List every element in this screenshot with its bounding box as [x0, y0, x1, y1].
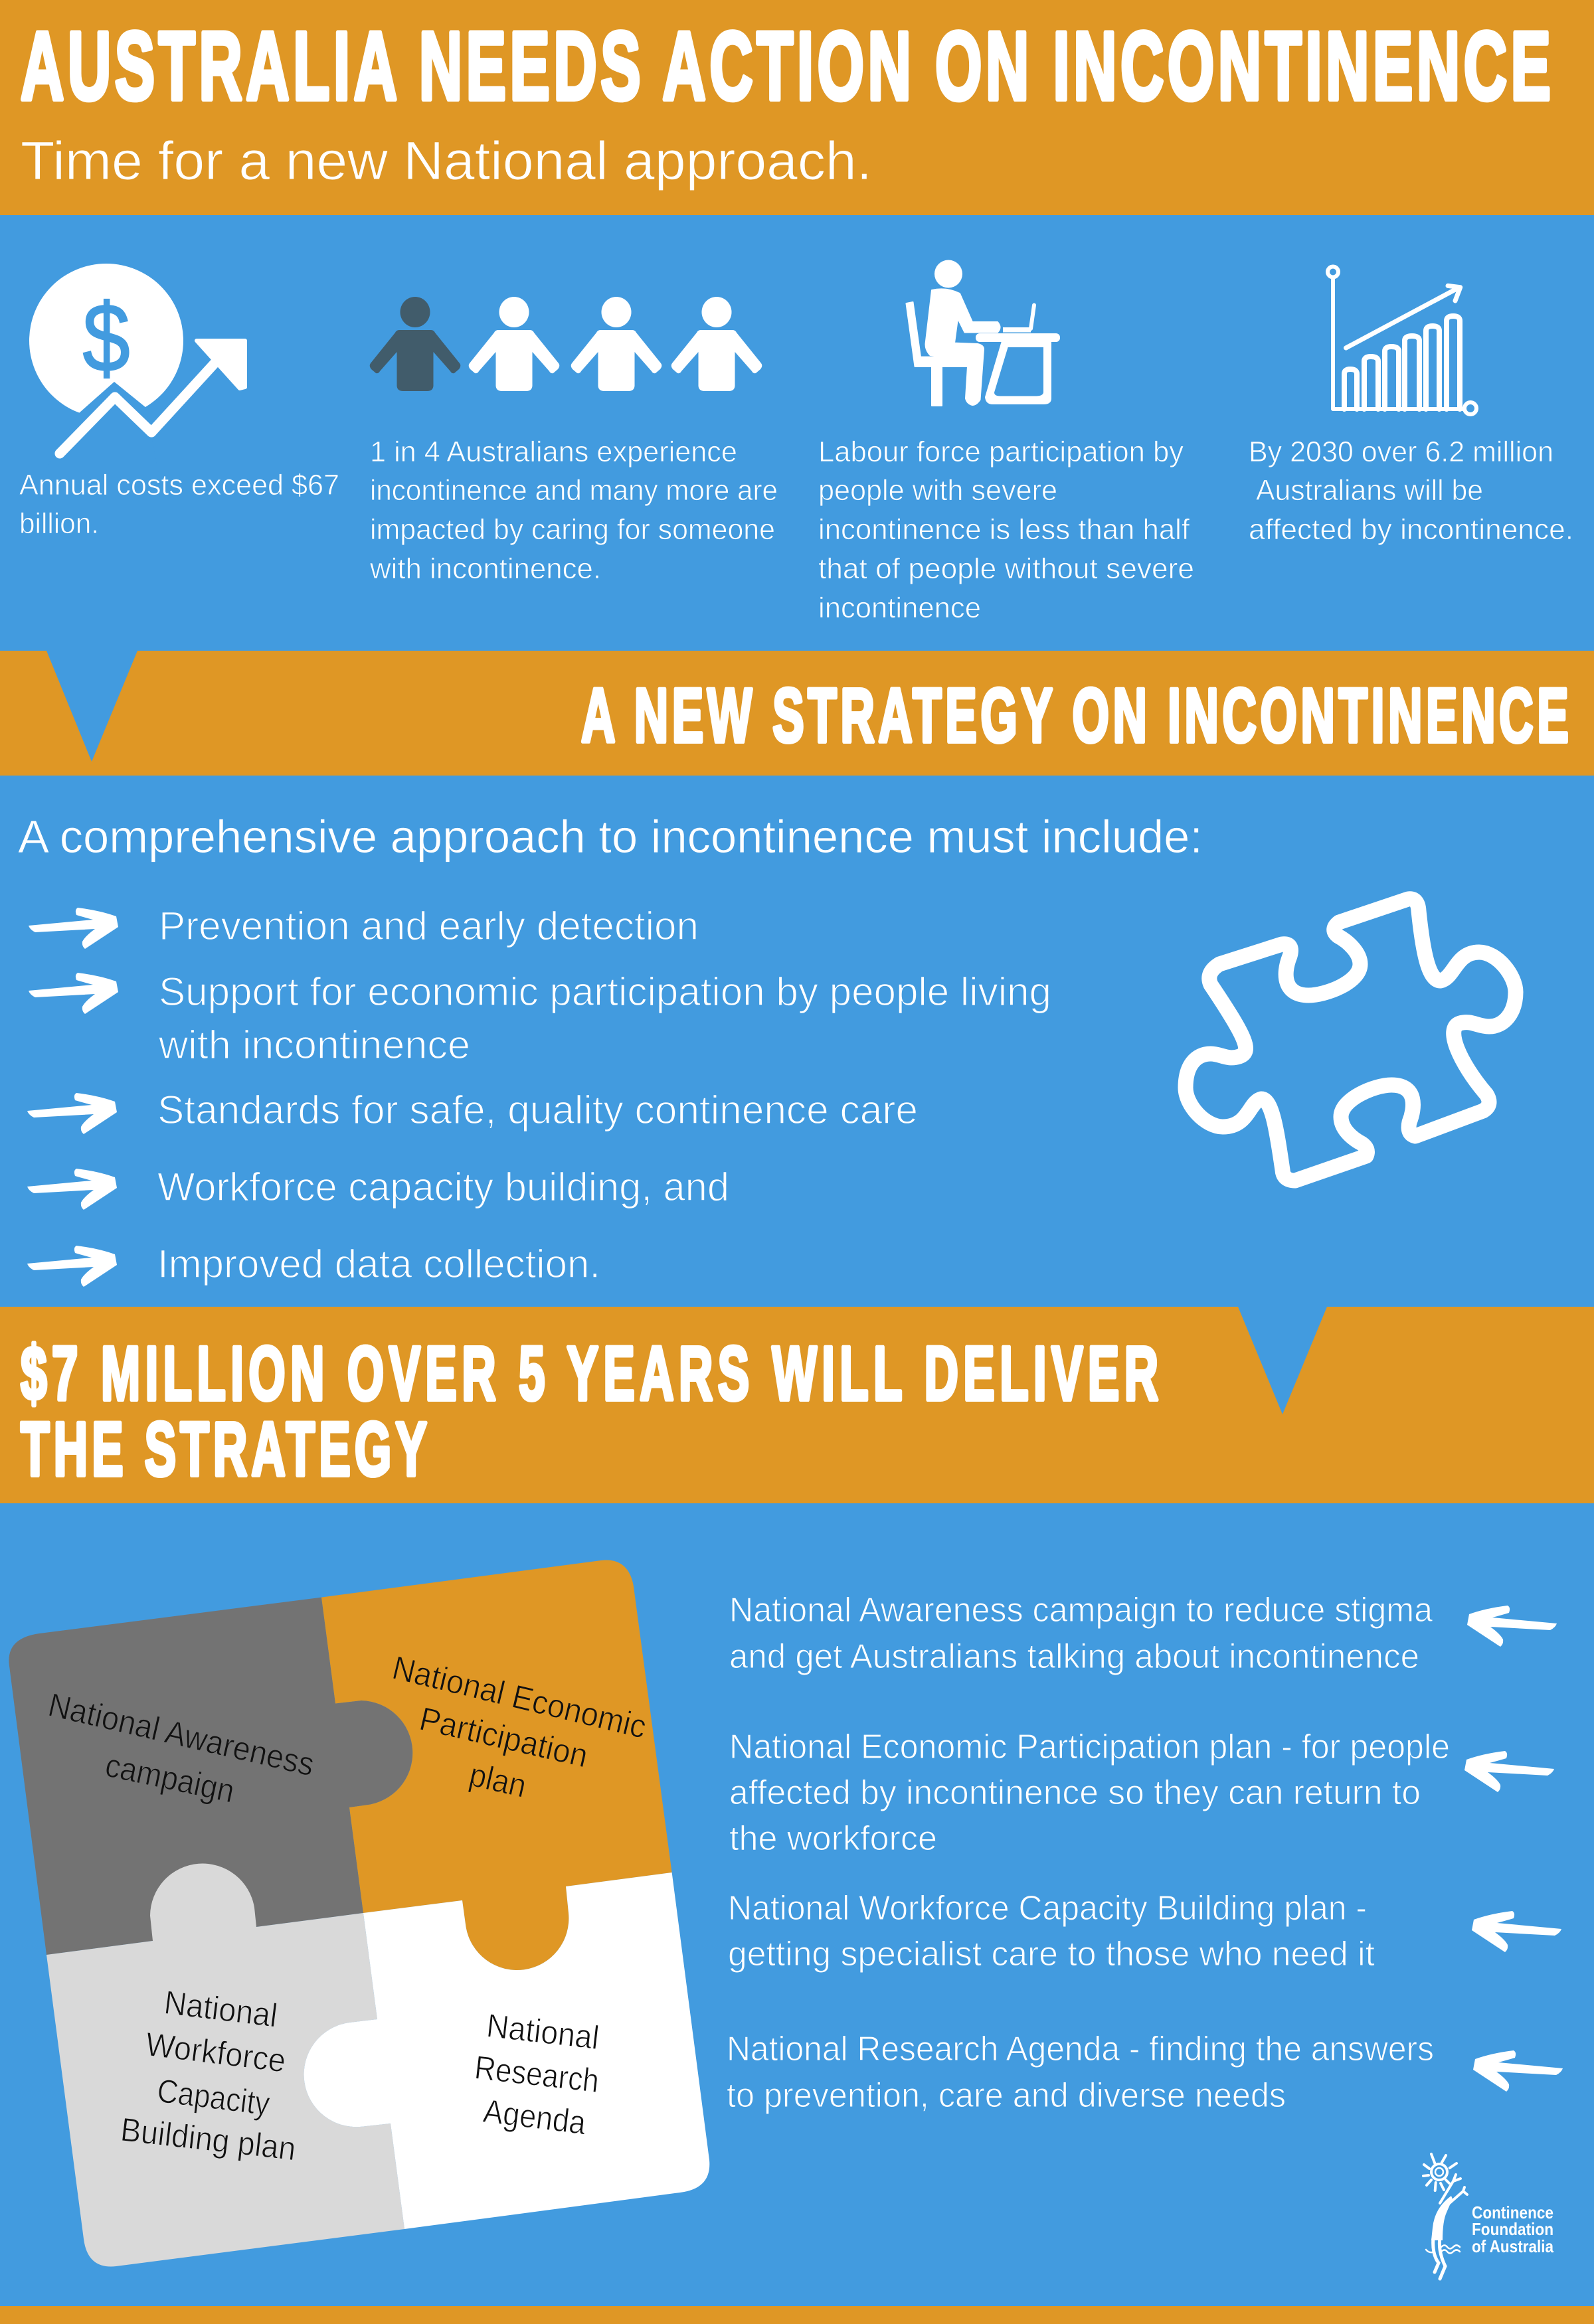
bullet text 2 [158, 969, 1051, 1067]
heading: funding: $7 MILLION OVER 5 YEARS WILL DELIVER [21, 1331, 1158, 1416]
piece: national workforce capacity building plan: Workforce [143, 2025, 288, 2080]
text: labour force participation: incontinence is less than half [818, 513, 1190, 546]
subtitle: Time for a new National approach. [21, 131, 872, 191]
bullet arrow 2 [29, 973, 118, 1014]
text: by 2030 [1249, 436, 1573, 546]
icon: coin with rising arrow [29, 264, 245, 478]
text: annual costs [19, 469, 339, 540]
piece: national economic participation plan: plan [466, 1756, 530, 1805]
plan description: economic participation [729, 1728, 1450, 1858]
piece: national workforce capacity building plan: Capacity [155, 2072, 272, 2123]
arrow: awareness [1467, 1606, 1557, 1647]
text: 1 in 4 Australians: impacted by caring for someone [370, 513, 775, 546]
heading: a new strategy: A NEW STRATEGY ON INCONTINENCE [581, 673, 1569, 758]
piece: national awareness campaign [9, 1598, 412, 1955]
plan description: research [727, 2030, 1434, 2115]
jigsaw of four plans [9, 1560, 709, 2266]
heading: funding: THE STRATEGY [21, 1407, 427, 1492]
bullet list [27, 904, 1051, 1287]
piece: national research agenda: Research [473, 2048, 601, 2100]
plan description: workforce [728, 1889, 1375, 1973]
plan description: workforce: getting specialist care to those who need it [728, 1935, 1375, 1973]
icon: four people, one highlighted [370, 297, 762, 391]
plan description: economic participation: National Economic Participation plan - for people [729, 1728, 1450, 1766]
text: by 2030: affected by incontinence. [1249, 513, 1573, 546]
footer band [0, 2306, 1594, 2324]
band: funding [0, 1307, 1594, 1503]
heading: funding [21, 1331, 1158, 1492]
bullet arrow 5 [27, 1246, 117, 1287]
arrow: economic participation [1464, 1751, 1554, 1792]
logo wordmark [1472, 2202, 1553, 2256]
icon: puzzle piece outline [1186, 899, 1516, 1181]
logo wordmark: Continence [1472, 2202, 1553, 2222]
piece: national economic participation plan [321, 1560, 672, 1970]
bullet text 5: Improved data collection. [157, 1242, 600, 1286]
bullet arrow 3 [27, 1093, 117, 1134]
plan description: awareness [729, 1591, 1433, 1676]
piece: national research agenda: Agenda [482, 2092, 588, 2141]
text: 1 in 4 Australians [369, 436, 778, 585]
piece: national workforce capacity building plan: Building plan [119, 2111, 298, 2167]
bullet text 3: Standards for safe, quality continence care [157, 1088, 918, 1132]
text: annual costs: billion. [19, 507, 99, 540]
icon: rising bar chart [1328, 267, 1476, 414]
logo wordmark: of Australia [1472, 2236, 1553, 2256]
text: by 2030: By 2030 over 6.2 million [1249, 436, 1553, 468]
text: labour force participation: that of people without severe [818, 552, 1194, 585]
bullet text 4: Workforce capacity building, and [157, 1165, 729, 1209]
plan description: workforce: National Workforce Capacity Building plan - [728, 1889, 1367, 1928]
icon: coin with rising arrow: $ [82, 284, 130, 392]
text: labour force participation: people with severe [818, 474, 1057, 507]
text: 1 in 4 Australians: 1 in 4 Australians experience [370, 436, 737, 468]
bullet text 2: with incontinence [158, 1023, 470, 1067]
text: labour force participation: Labour force participation by [818, 436, 1184, 468]
piece: national awareness campaign: campaign [102, 1746, 238, 1810]
text: labour force participation: incontinence [818, 592, 981, 624]
logo: Continence Foundation of Australia [1423, 2154, 1553, 2279]
text: labour force participation [818, 436, 1194, 624]
piece: national workforce capacity building plan: National [162, 1983, 280, 2034]
text: annual costs: Annual costs exceed $67 [19, 469, 339, 501]
plan description: economic participation: the workforce [729, 1819, 937, 1858]
logo wordmark: Foundation [1472, 2219, 1553, 2239]
plan description: economic participation: affected by incontinence so they can return to [729, 1774, 1421, 1812]
bullet arrow 1 [29, 908, 118, 949]
header band [0, 0, 1594, 215]
text: 1 in 4 Australians: with incontinence. [369, 552, 601, 585]
logo figure and sun [1423, 2154, 1467, 2279]
plan description: research: National Research Agenda - finding the answers [727, 2030, 1434, 2068]
band: a new strategy [0, 651, 1594, 776]
arrow: research [1473, 2050, 1563, 2092]
bullet arrow 4 [27, 1169, 117, 1210]
text: 1 in 4 Australians: incontinence and many more are [370, 474, 778, 507]
piece: national research agenda: National [485, 2007, 601, 2056]
piece: national awareness campaign: National Awareness [45, 1686, 318, 1784]
piece: national economic participation plan: National Economic [389, 1649, 650, 1746]
text: by 2030: Australians will be [1256, 474, 1483, 507]
piece: national workforce capacity building plan [46, 1864, 404, 2266]
piece: national economic participation plan: Participation [416, 1700, 592, 1775]
arrow: workforce [1472, 1911, 1561, 1952]
piece: national research agenda [304, 1872, 709, 2229]
intro line: A comprehensive approach to incontinence must include: [18, 811, 1203, 863]
bullet text 1: Prevention and early detection [159, 904, 699, 948]
plan description: awareness: and get Australians talking about incontinence [729, 1637, 1419, 1676]
icon: person working at desk [906, 260, 1060, 406]
title: AUSTRALIA NEEDS ACTION ON INCONTINENCE [21, 11, 1551, 120]
plan description: research: to prevention, care and diverse needs [727, 2076, 1286, 2115]
bullet text 2: Support for economic participation by people living [159, 969, 1051, 1014]
plan description: awareness: National Awareness campaign to reduce stigma [729, 1591, 1433, 1629]
